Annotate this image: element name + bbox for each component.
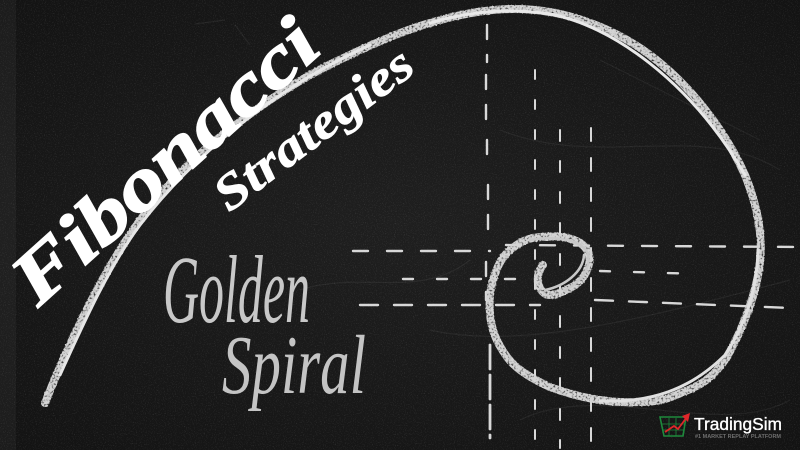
dashed chalk guide lines: [353, 25, 800, 448]
logo tagline: #1 MARKET REPLAY PLATFORM: [695, 434, 781, 440]
logo: TradingSim: [660, 413, 782, 440]
handwritten label: Golden: Golden: [163, 236, 310, 343]
icon: green basket with red arrow: [660, 413, 690, 436]
subtitle: Strategies: Strategies: [202, 35, 424, 222]
handwritten label: Spiral: Spiral: [222, 319, 366, 412]
logo wordmark: TradingSim: [694, 414, 782, 434]
golden spiral: [45, 9, 761, 403]
vertical guide lines: [486, 25, 591, 448]
title: Fibonacci: Fibonacci: [0, 2, 336, 321]
horizontal guide lines: [353, 245, 800, 308]
